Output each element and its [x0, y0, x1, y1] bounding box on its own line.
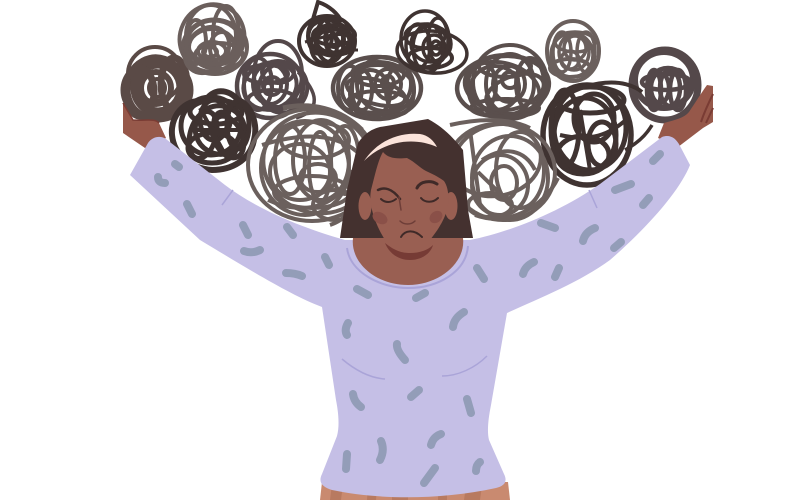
- left hand: [123, 103, 166, 148]
- scribble: top centre-left black: [299, 2, 358, 66]
- scribble: far left dark ball: [118, 47, 190, 125]
- scribble: lower right black: [543, 83, 652, 185]
- neck: [353, 238, 463, 285]
- scribble: centre: [333, 57, 421, 119]
- scribble: lower left black: [172, 91, 255, 170]
- sweater dashes: [158, 154, 660, 483]
- scribble: far right dark ball: [632, 50, 698, 120]
- collar line: [347, 246, 468, 288]
- scribble: large lower centre-left: [248, 100, 384, 226]
- headband: [364, 134, 437, 161]
- scribble: middle left: [237, 41, 316, 122]
- sweater seam and chest lines: [222, 190, 597, 379]
- skirt: [320, 482, 510, 500]
- eyebrows and closed eyes: [378, 182, 438, 210]
- scribble: large lower right: [444, 118, 558, 220]
- scribble: upper left: [169, 0, 255, 82]
- scribble: centre right: [455, 45, 551, 122]
- cheeks: [370, 208, 445, 227]
- face: [370, 152, 448, 240]
- hair: [340, 119, 473, 238]
- right hand: [658, 85, 713, 147]
- nose and mouth: [400, 221, 422, 237]
- sweater: [130, 136, 690, 497]
- scribble: top right: [547, 21, 599, 81]
- ears: [358, 192, 458, 220]
- chin shadow: [385, 243, 433, 260]
- scribble: top centre: [395, 11, 469, 76]
